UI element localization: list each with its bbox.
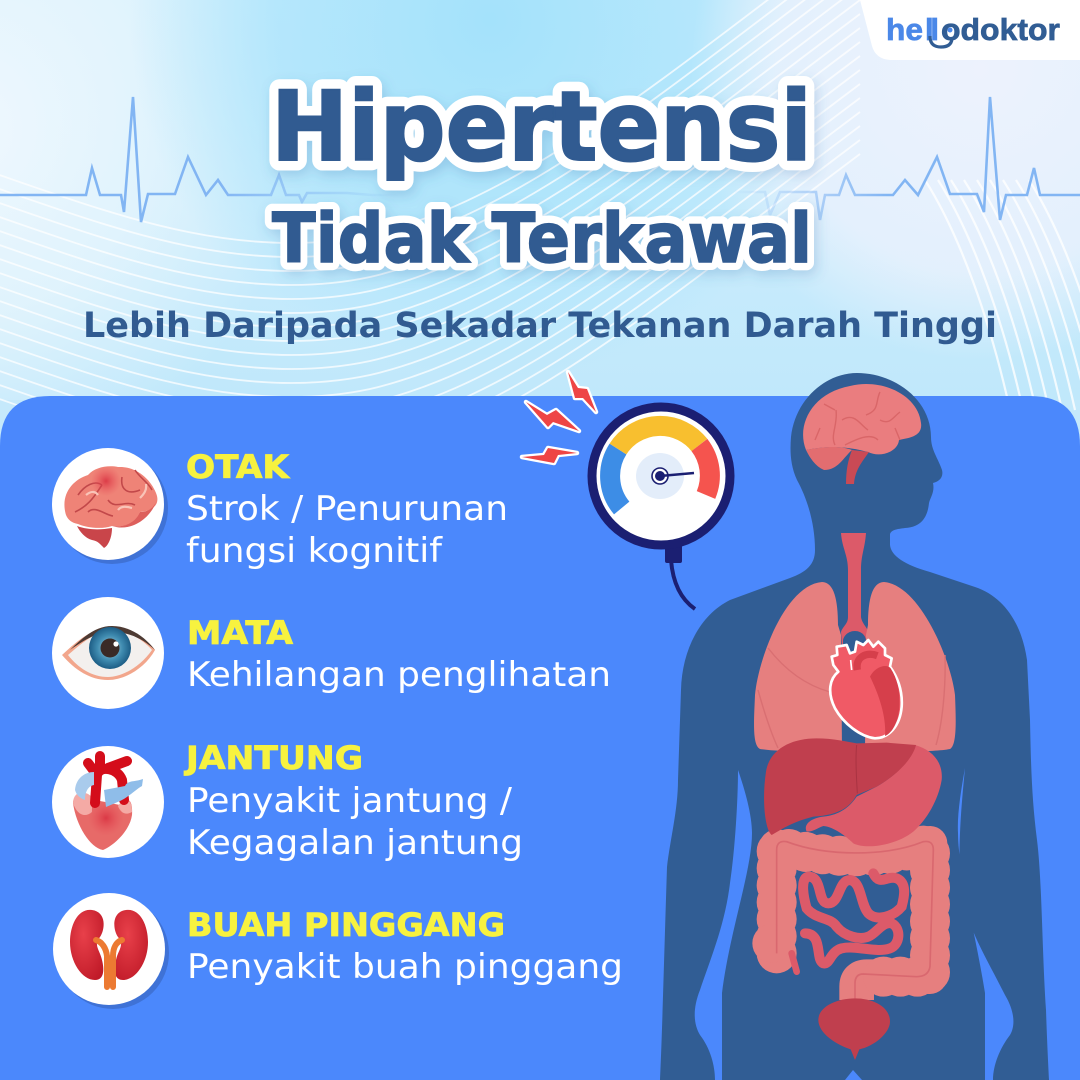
- label: buah pinggang: BUAH PINGGANG: [187, 906, 505, 944]
- description: otak: Strok / Penurunan: [186, 489, 508, 529]
- label: mata: MATA: [187, 614, 293, 652]
- title line 2: Tidak Terkawal: [272, 199, 812, 279]
- liver: [764, 738, 916, 835]
- description: otak: fungsi kognitif: [186, 531, 443, 571]
- lungs: [754, 582, 956, 751]
- icon: eye: [52, 597, 164, 709]
- icon: kidneys: [53, 893, 169, 1009]
- title line 1: Hipertensi: [271, 71, 812, 183]
- logo wordmark: ll: [925, 12, 939, 47]
- stomach: [806, 745, 942, 846]
- description: mata: Kehilangan penglihatan: [187, 655, 611, 695]
- heart: [830, 640, 902, 738]
- gauge cord: [671, 560, 695, 609]
- arch gap: [843, 631, 866, 648]
- trachea: [841, 533, 868, 646]
- alert bolts: [522, 372, 596, 463]
- logo wordmark: odoktor: [941, 12, 1060, 47]
- ECG line left: [0, 97, 400, 222]
- body silhouette: [660, 373, 1049, 1080]
- gauge face: [592, 407, 730, 545]
- label: jantung: JANTUNG: [184, 739, 363, 777]
- item: jantung: [52, 739, 523, 863]
- blood pressure gauge: [592, 407, 730, 609]
- gauge yellow arc: [618, 426, 699, 449]
- human body illustration: [660, 373, 1049, 1080]
- background: [0, 0, 1080, 467]
- small intestine: [803, 873, 904, 963]
- subtitle: Lebih Daripada Sekadar Tekanan Darah Tinggi: [83, 306, 997, 346]
- gauge stem: [665, 545, 682, 563]
- description: jantung: [187, 781, 523, 863]
- digestive organs: [752, 738, 942, 1060]
- gauge blue arc: [610, 449, 622, 508]
- logo wordmark: [886, 12, 1060, 47]
- icon: brain: [52, 448, 168, 564]
- description: jantung: Kegagalan jantung: [187, 823, 523, 863]
- title line 2: Tidak Terkawal: [272, 199, 812, 279]
- title: [271, 71, 812, 279]
- gauge red arc: [699, 445, 710, 495]
- item: otak: [52, 448, 508, 571]
- item: mata: [52, 597, 611, 709]
- description: jantung: Penyakit jantung /: [187, 781, 513, 821]
- description: otak: [186, 489, 508, 571]
- logo tab: [860, 0, 1080, 60]
- gauge hub and needle: [636, 453, 694, 499]
- brain: [803, 384, 921, 484]
- icon: heart: [52, 746, 164, 858]
- item: buah pinggang: [53, 893, 623, 1009]
- label: otak: OTAK: [186, 448, 290, 486]
- colon: [752, 841, 933, 1000]
- ECG line right: [735, 97, 1080, 220]
- logo wordmark: he: [886, 12, 923, 47]
- bladder: [818, 998, 890, 1060]
- title line 1: Hipertensi: [271, 71, 812, 183]
- panel: blue content area: [0, 396, 1080, 1080]
- description: buah pinggang: Penyakit buah pinggang: [187, 947, 623, 987]
